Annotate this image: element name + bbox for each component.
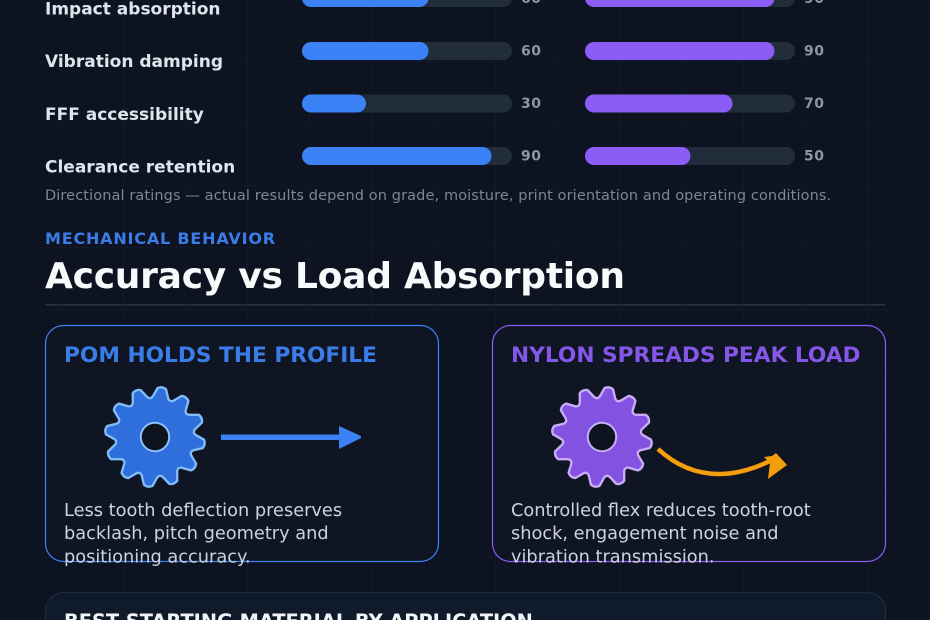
panel: POM	[46, 326, 438, 568]
row: clearance retention	[45, 147, 824, 178]
panel: POM: positioning accuracy.	[64, 548, 251, 568]
row: FFF accessibility: FFF accessibility	[45, 105, 204, 125]
panel: POM: backlash, pitch geometry and	[64, 524, 329, 544]
row: FFF accessibility: 30	[521, 96, 541, 112]
POM heading: POM HOLDS THE PROFILE	[64, 343, 377, 368]
panel: Nylon: shock, engagement noise and	[511, 524, 778, 544]
row: vibration damping: Vibration damping	[45, 52, 223, 72]
row: impact absorption	[45, 0, 824, 20]
POM description: Less tooth deflection preserves	[64, 501, 342, 521]
row: vibration damping: 90	[804, 44, 824, 60]
arrow: straight	[221, 426, 361, 449]
row: clearance retention: 50	[804, 148, 824, 164]
panel: best starting material	[46, 592, 886, 620]
footnote: Directional ratings — actual results depend on grade, moisture, print orientation and operating conditions.	[45, 188, 831, 204]
panel: Nylon	[492, 326, 886, 568]
row: vibration damping	[45, 42, 824, 72]
row: clearance retention: Clearance retention	[45, 158, 235, 178]
Nylon description: Controlled flex reduces tooth-root	[511, 501, 811, 521]
section divider	[45, 304, 885, 306]
ratings section: material comparison bars	[45, 0, 824, 178]
arrow: curved	[658, 449, 787, 479]
row: FFF accessibility: 70	[804, 96, 824, 112]
section eyebrow: MECHANICAL BEHAVIOR	[45, 229, 276, 248]
Nylon heading: NYLON SPREADS PEAK LOAD	[511, 343, 861, 368]
section title: Accuracy vs Load Absorption	[45, 256, 625, 297]
icon: POM gear	[98, 380, 212, 494]
row: vibration damping: 60	[521, 44, 541, 60]
row: clearance retention: 90	[521, 148, 541, 164]
row: impact absorption: Impact absorption	[45, 0, 221, 20]
row: FFF accessibility	[45, 94, 824, 125]
panel: Nylon: vibration transmission.	[511, 548, 715, 568]
icon: Nylon gear	[545, 380, 659, 494]
